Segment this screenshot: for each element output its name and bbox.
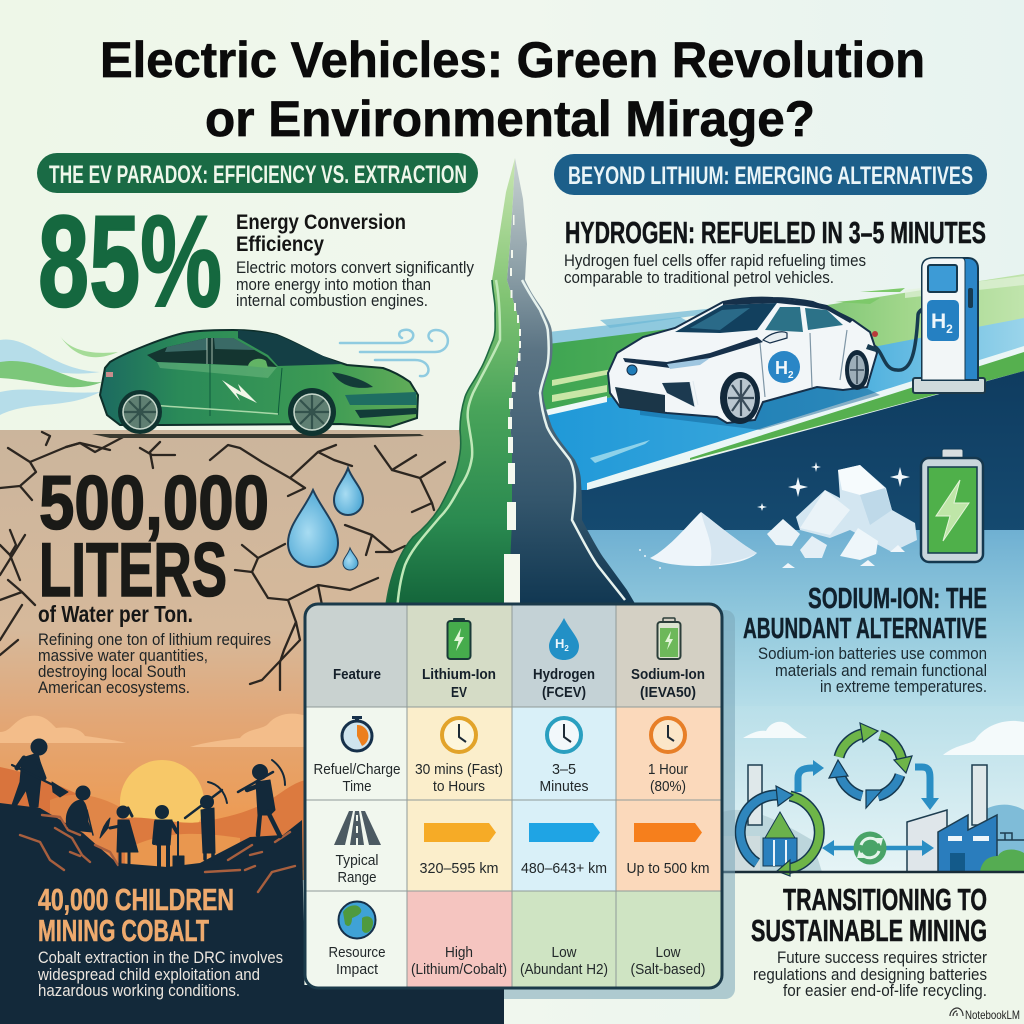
- illustration: hydrogen pump: H: [931, 310, 946, 333]
- double arrow with recycle badge: [832, 846, 922, 850]
- text block: hydrogen fuel cells: [564, 252, 866, 287]
- text block: hydrogen fuel cells: comparable to traditional petrol vehicles.: [564, 269, 834, 287]
- text block: water per ton: Refining one ton of lithium requires: [38, 631, 271, 649]
- icon: clock amber: [442, 718, 476, 752]
- stat: 40,000 children mining cobalt: 40,000 CHILDREN: [38, 882, 234, 917]
- table row: typical range: [334, 811, 710, 886]
- icon: wind lines ahead of green car: [340, 330, 448, 376]
- road: green half: [385, 158, 520, 612]
- table row: refuel or charge time: 30 mins (Fast): [415, 761, 503, 778]
- illustration: hydrogen pump: [871, 258, 985, 393]
- icon: water drops: [288, 468, 363, 570]
- table row: refuel or charge time: [314, 716, 688, 795]
- text block: cobalt extraction: widespread child exploitation and: [37, 966, 260, 984]
- icon: hydrogen drop: 2: [564, 644, 569, 653]
- mine inside small loop: [765, 812, 795, 838]
- icon: green battery: [921, 449, 983, 562]
- table row: resource impact: Low: [552, 944, 577, 961]
- illustration: salt pile and rocks: [639, 465, 917, 569]
- miner silhouettes: [12, 739, 285, 867]
- icon: amber range arrow: [424, 823, 496, 842]
- table row: typical range: Range: [338, 869, 376, 886]
- title: [100, 32, 925, 147]
- comparison table: [305, 604, 735, 999]
- table row: typical range: Typical: [336, 852, 378, 869]
- table header row: (IEVA50): [640, 684, 696, 701]
- table row: resource impact: Impact: [336, 961, 379, 978]
- icon: hydrogen drop: H: [555, 636, 564, 651]
- text block: cobalt extraction: Cobalt extraction in the DRC involves: [38, 949, 283, 967]
- grey and blue factory: [907, 810, 947, 872]
- icon: orange range arrow: [634, 823, 702, 842]
- illustration: hydrogen car: H: [775, 358, 788, 378]
- road: [385, 158, 640, 612]
- left chimney: [748, 765, 762, 825]
- table header row: Lithium-Ion: [422, 666, 496, 683]
- text block: energy conversion efficiency: Electric motors convert significantly: [236, 259, 475, 277]
- text block: energy conversion efficiency: more energy into motion than: [236, 276, 431, 294]
- table row: refuel or charge time: (80%): [650, 778, 686, 795]
- icon: hydrogen drop: [549, 618, 579, 660]
- text block: future success: [753, 949, 987, 1000]
- table row: refuel or charge time: Time: [342, 778, 372, 795]
- stat: 500,000 liters: [39, 461, 269, 613]
- road: grey half: [507, 158, 640, 612]
- panel: recycling scene sky: [700, 706, 1024, 872]
- rock veins: [20, 815, 295, 892]
- text block: cobalt extraction: hazardous working conditions.: [38, 982, 240, 1000]
- table row: typical range: 480–643+ km: [521, 860, 607, 877]
- title: or Environmental Mirage?: [205, 91, 815, 147]
- table row: typical range: 320–595 km: [420, 860, 498, 877]
- table header row: Sodium-Ion: [631, 666, 705, 683]
- stat: 500,000 liters: 500,000: [39, 461, 269, 546]
- icon: sodium battery: [658, 618, 680, 659]
- table row: refuel or charge time: 3–5: [552, 761, 576, 778]
- heading badge: beyond lithium: [554, 154, 987, 195]
- table header row: EV: [451, 684, 467, 701]
- panel: sodium-ion background: [560, 371, 1024, 710]
- text block: sodium-ion batteries: materials and remain functional: [775, 662, 987, 680]
- text block: energy conversion efficiency: Efficiency: [236, 233, 324, 256]
- illustration: hydrogen car: [608, 298, 880, 430]
- text block: sodium-ion batteries: Sodium-ion batteries use common: [758, 645, 987, 663]
- panel: right hydrogen road scene: [535, 274, 1024, 491]
- text block: cobalt extraction: [37, 949, 283, 1000]
- table header row: Hydrogen: [533, 666, 595, 683]
- text block: energy conversion efficiency: Energy Conversion: [236, 211, 406, 234]
- table row: refuel or charge time: 1 Hour: [648, 761, 688, 778]
- blue connector arrows: [798, 768, 815, 792]
- stat: 40,000 children mining cobalt: [38, 882, 234, 948]
- heading: transitioning to sustainable mining: [751, 882, 987, 948]
- illustration: green electric car: [92, 330, 424, 438]
- illustration: hydrogen pump: 2: [946, 322, 953, 336]
- text block: sodium-ion batteries: [758, 645, 987, 696]
- icon: wind streaks behind green car: [0, 336, 118, 415]
- dark ground: [0, 803, 305, 1024]
- table row: resource impact: High: [445, 944, 473, 961]
- table row: resource impact: (Abundant H2): [520, 961, 608, 978]
- icon: blue range arrow: [529, 823, 600, 842]
- table row: resource impact: (Salt-based): [630, 961, 706, 978]
- icon: sparkles: [757, 462, 910, 511]
- text block: sodium-ion batteries: in extreme temperatures.: [820, 678, 987, 696]
- icon: stopwatch: [342, 716, 372, 751]
- text block: future success: for easier end-of-life recycling.: [783, 982, 987, 1000]
- table header row: (FCEV): [542, 684, 586, 701]
- cracks in dry earth: [0, 432, 445, 690]
- table cell fills: [305, 604, 722, 988]
- horizon line: [722, 871, 1024, 873]
- table row: refuel or charge time: Minutes: [540, 778, 588, 795]
- text block: water per ton: destroying local South: [38, 663, 186, 681]
- table row: refuel or charge time: to Hours: [433, 778, 485, 795]
- table row: refuel or charge time: Refuel/Charge: [314, 761, 400, 778]
- icon: road: [334, 811, 381, 845]
- text block: hydrogen fuel cells: Hydrogen fuel cells offer rapid refueling times: [564, 252, 866, 270]
- text block: water per ton: American ecosystems.: [38, 679, 190, 697]
- table header row: [333, 666, 705, 701]
- table row: resource impact: Low: [656, 944, 681, 961]
- table row: resource impact: (Lithium/Cobalt): [411, 961, 507, 978]
- heading badge: the EV paradox: [37, 153, 478, 193]
- stat: 40,000 children mining cobalt: MINING COBALT: [38, 913, 209, 948]
- icon: clock blue: [547, 718, 581, 752]
- panel: bottom right background: [700, 872, 1024, 1024]
- text block: future success: Future success requires stricter: [777, 949, 987, 967]
- illustration: cobalt mining sunset: [0, 714, 504, 1024]
- text block: water per ton: massive water quantities,: [38, 647, 208, 665]
- icon: lithium battery: [448, 618, 470, 659]
- table row: resource impact: Resource: [328, 944, 386, 961]
- text block: water per ton: [38, 601, 271, 697]
- table row: typical range: Up to 500 km: [626, 860, 710, 877]
- table header row: Feature: [333, 666, 381, 683]
- large recycling loop: [839, 733, 902, 796]
- illustration: recycling and sustainable mining: [722, 721, 1024, 876]
- stat: 85%: 85%: [38, 188, 222, 334]
- title: Electric Vehicles: Green Revolution: [100, 32, 925, 88]
- text block: energy conversion efficiency: [236, 211, 475, 310]
- heading badge: the EV paradox: THE EV PARADOX: EFFICIENCY VS. EXTRACTION: [49, 161, 467, 189]
- icon: globe: [338, 902, 376, 938]
- icon: clock orange: [651, 718, 685, 752]
- panel: cracked earth ground: [0, 430, 470, 880]
- small recycling loop: [740, 795, 819, 869]
- text block: water per ton: of Water per Ton.: [38, 601, 193, 627]
- table row: resource impact: [328, 902, 706, 978]
- illustration: hydrogen car: 2: [788, 370, 794, 381]
- road: centre dashes: [504, 215, 521, 604]
- text block: energy conversion efficiency: internal combustion engines.: [236, 292, 428, 310]
- text block: future success: regulations and designing batteries: [753, 966, 987, 984]
- heading: sodium-ion: [743, 583, 987, 645]
- stat: 500,000 liters: LITERS: [39, 528, 227, 613]
